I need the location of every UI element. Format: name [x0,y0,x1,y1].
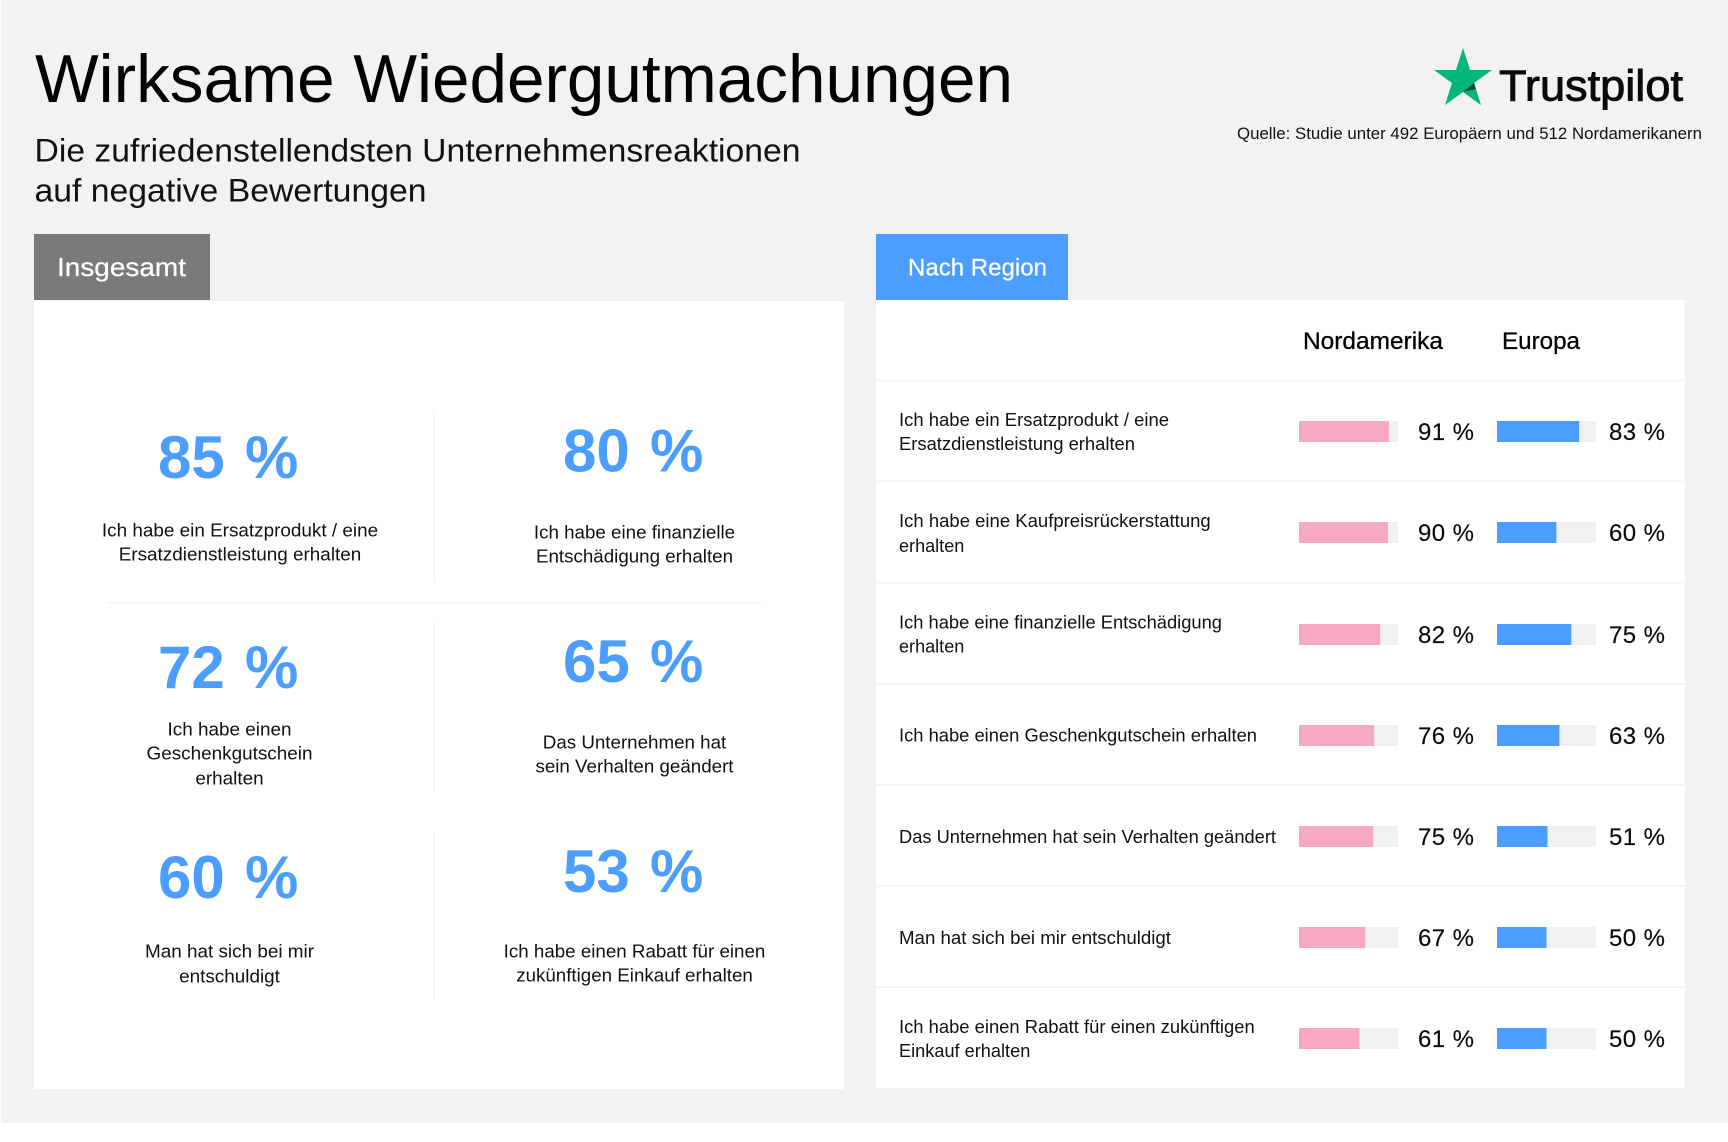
row: Ersatzprodukt: 83 % [1609,419,1665,446]
stat: 72 % [147,634,312,790]
row: Ersatzprodukt [899,409,1665,454]
row: Verhalten geändert: 51 % [1609,824,1665,851]
stat: 80 %: Entschädigung erhalten [536,546,733,566]
row: entschuldigt: 50 % [1609,925,1665,952]
column header: Europa: Europa [1502,328,1580,355]
stat: 80 %: Ich habe eine finanzielle [534,522,735,542]
stat: 72 %: Geschenkgutschein [147,744,312,764]
stat: 85 % [102,424,378,566]
stat: 65 %: 65 [563,628,630,695]
tab: Nach Region: Nach Region [908,254,1047,282]
stat: 60 %: % [245,844,298,911]
row: Geschenkgutschein: Ich habe einen Geschenkgutschein erhalten [899,724,1257,746]
stat: 65 %: Das Unternehmen hat [543,732,727,752]
stat: 85 %: % [245,424,298,491]
stat: 80 %: % [650,418,703,484]
stat: 65 %: sein Verhalten geändert [535,756,734,776]
row: finanzielle Entschädigung: Ich habe eine finanzielle Entschädigung [899,612,1222,632]
row: Geschenkgutschein: 76 % [1418,723,1474,750]
tab: Nach Region [876,234,1068,300]
row: finanzielle Entschädigung [899,612,1665,656]
row: Rabatt [899,1016,1665,1061]
row: Geschenkgutschein [899,723,1665,750]
row: finanzielle Entschädigung: 82 % [1418,622,1474,649]
stat: 72 %: 72 [158,634,225,701]
stat: 53 % [504,838,765,986]
column header: Nordamerika: Nordamerika [1303,328,1443,355]
stat: 53 %: zukünftigen Einkauf erhalten [516,964,753,986]
stat: 72 %: erhalten [195,768,264,790]
row: finanzielle Entschädigung: erhalten [899,636,964,656]
row: Kaufpreisrückerstattung: Ich habe eine Kaufpreisrückerstattung [899,510,1211,531]
stat: 53 %: Ich habe einen Rabatt für einen [504,940,765,962]
row: Verhalten geändert: Das Unternehmen hat sein Verhalten geändert [899,826,1276,847]
row: Verhalten geändert: 75 % [1418,824,1474,851]
stat: 85 %: 85 [158,424,225,491]
stat: 65 %: % [650,628,703,695]
row: Geschenkgutschein: 63 % [1609,723,1665,750]
stat: 72 %: % [245,634,298,701]
row: Kaufpreisrückerstattung: 90 % [1418,520,1474,547]
icon: Trustpilot logo: Trustpilot [1499,62,1683,110]
row: Ersatzprodukt: Ersatzdienstleistung erhalten [899,433,1135,454]
row: Kaufpreisrückerstattung [899,510,1665,556]
stat: 60 %: 60 [158,844,225,911]
stat: 65 % [535,628,734,776]
stat: 60 %: entschuldigt [179,966,281,988]
stat: 80 % [534,418,735,566]
row: entschuldigt: Man hat sich bei mir entschuldigt [899,927,1171,948]
row: Rabatt: Einkauf erhalten [899,1040,1030,1061]
row: Verhalten geändert [899,824,1665,851]
stat: 80 %: 80 [563,418,630,484]
title: Wirksame Wiedergutmachungen [35,41,1013,117]
row: finanzielle Entschädigung: 75 % [1609,622,1665,649]
row: entschuldigt [899,925,1665,952]
stat: 53 %: 53 [563,838,630,905]
row: entschuldigt: 67 % [1418,925,1474,952]
subtitle: auf negative Bewertungen [34,172,426,208]
tab: Insgesamt: Insgesamt [57,252,187,282]
row: Rabatt: Ich habe einen Rabatt für einen zukünftigen [899,1016,1255,1037]
stat: 85 %: Ersatzdienstleistung erhalten [119,544,361,566]
row: Rabatt: 50 % [1609,1026,1665,1053]
subtitle [34,132,800,208]
stat: 60 % [145,844,314,988]
row: Kaufpreisrückerstattung: 60 % [1609,520,1665,547]
row: Kaufpreisrückerstattung: erhalten [899,535,964,556]
stat: 85 %: Ich habe ein Ersatzprodukt / eine [102,520,378,542]
panel: Insgesamt [34,301,844,1089]
source note: Quelle: Studie unter 492 Europäern und 512 Nordamerikanern [1237,124,1702,143]
stat: 72 %: Ich habe einen [168,720,291,740]
icon: Trustpilot logo [1434,48,1683,110]
panel: Nach Region [876,300,1684,1088]
row: Rabatt: 61 % [1418,1026,1474,1053]
stat: 53 %: % [650,838,703,905]
subtitle: Die zufriedenstellendsten Unternehmensreaktionen [34,132,800,168]
row: Ersatzprodukt: Ich habe ein Ersatzprodukt / eine [899,409,1169,430]
tab: Insgesamt [34,234,210,300]
row: Ersatzprodukt: 91 % [1418,419,1474,446]
stat: 60 %: Man hat sich bei mir [145,942,314,962]
